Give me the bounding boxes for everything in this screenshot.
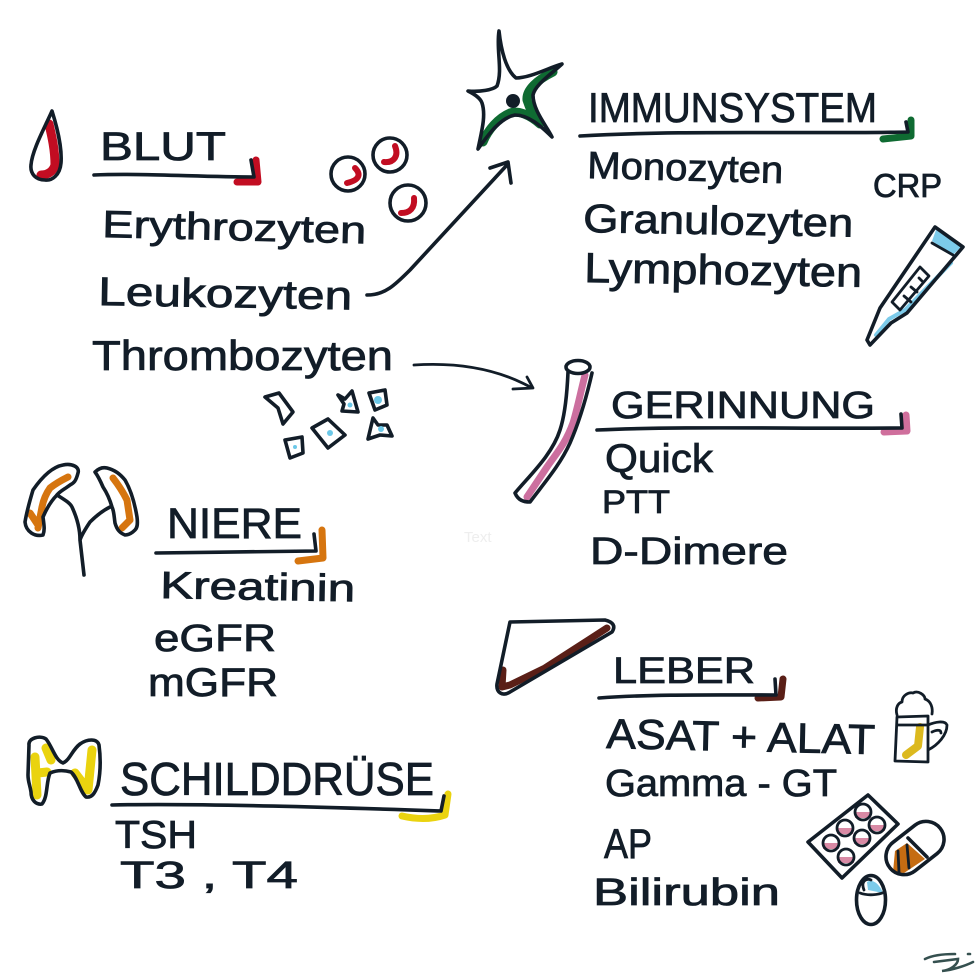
- icon: blood drop: [31, 111, 61, 180]
- list: coagulation values: D-Dimere: [590, 531, 788, 573]
- list: thyroid values: [115, 814, 298, 897]
- heading: Leber: LEBER: [613, 650, 755, 691]
- heading: Niere: NIERE: [167, 500, 302, 548]
- list: blood values: Leukozyten: [98, 270, 353, 318]
- icon: immune cell: [468, 31, 562, 149]
- icon: capsule: [879, 814, 951, 882]
- list: liver values: Gamma - GT: [605, 763, 837, 805]
- arrow: Thrombozyten to Gerinnung: [414, 364, 533, 389]
- heading: Leber: [599, 650, 783, 698]
- list: blood values: Erythrozyten: [102, 204, 367, 252]
- panel: Niere: [25, 464, 356, 705]
- heading: Blut: [94, 125, 258, 182]
- heading: Schilddrüse: SCHILDDRÜSE: [120, 753, 434, 805]
- panel: Blut: [31, 111, 426, 458]
- arrow: Leukozyten to Immunsystem: [367, 162, 511, 295]
- panel: Leber: [497, 620, 951, 924]
- label: CRP: CRP: [873, 167, 942, 204]
- list: immune values: Granulozyten: [583, 197, 854, 246]
- list: thyroid values: T3 , T4: [120, 855, 298, 897]
- list: kidney values: Kreatinin: [160, 565, 356, 610]
- list: coagulation values: PTT: [602, 484, 670, 520]
- icon: kidneys: [25, 464, 137, 575]
- list: immune values: Lymphozyten: [584, 244, 863, 296]
- icon: red blood cells: [331, 138, 426, 221]
- icon: thermometer: [867, 227, 963, 345]
- list: liver values: ASAT + ALAT: [606, 710, 876, 763]
- signature: [925, 954, 973, 971]
- list: liver values: Bilirubin: [593, 872, 780, 914]
- list: blood values: Thrombozyten: [92, 332, 393, 379]
- heading: Blut: BLUT: [100, 125, 226, 169]
- icon: thyroid: [28, 737, 100, 804]
- list: thyroid values: TSH: [115, 814, 197, 857]
- list: immune values: [583, 145, 863, 296]
- list: kidney values: [148, 565, 356, 705]
- icon: small pill: [856, 876, 886, 924]
- faint placeholder label: Text: [464, 529, 492, 546]
- panel: Gerinnung: [515, 360, 907, 573]
- heading: Gerinnung: [597, 385, 907, 432]
- icon: liver: [497, 620, 614, 694]
- panel: Immunsystem: [468, 31, 963, 345]
- heading: Gerinnung: GERINNUNG: [611, 385, 875, 427]
- list: liver values: AP: [604, 820, 652, 867]
- list: kidney values: mGFR: [148, 661, 278, 705]
- list: liver values: [593, 710, 876, 914]
- list: coagulation values: [590, 437, 788, 573]
- icon: blister pack: [808, 795, 898, 878]
- icon: beer mug: [895, 692, 947, 762]
- list: blood values: [92, 204, 393, 379]
- heading: Niere: [156, 500, 323, 561]
- list: kidney values: eGFR: [154, 618, 276, 660]
- icon: platelets: [265, 390, 392, 458]
- heading: Immunsystem: IMMUNSYSTEM: [588, 84, 877, 131]
- icon: blood vessel: [515, 360, 592, 502]
- list: coagulation values: Quick: [605, 437, 714, 481]
- panel: Schilddrüse: [28, 737, 448, 897]
- list: immune values: Monozyten: [587, 145, 784, 192]
